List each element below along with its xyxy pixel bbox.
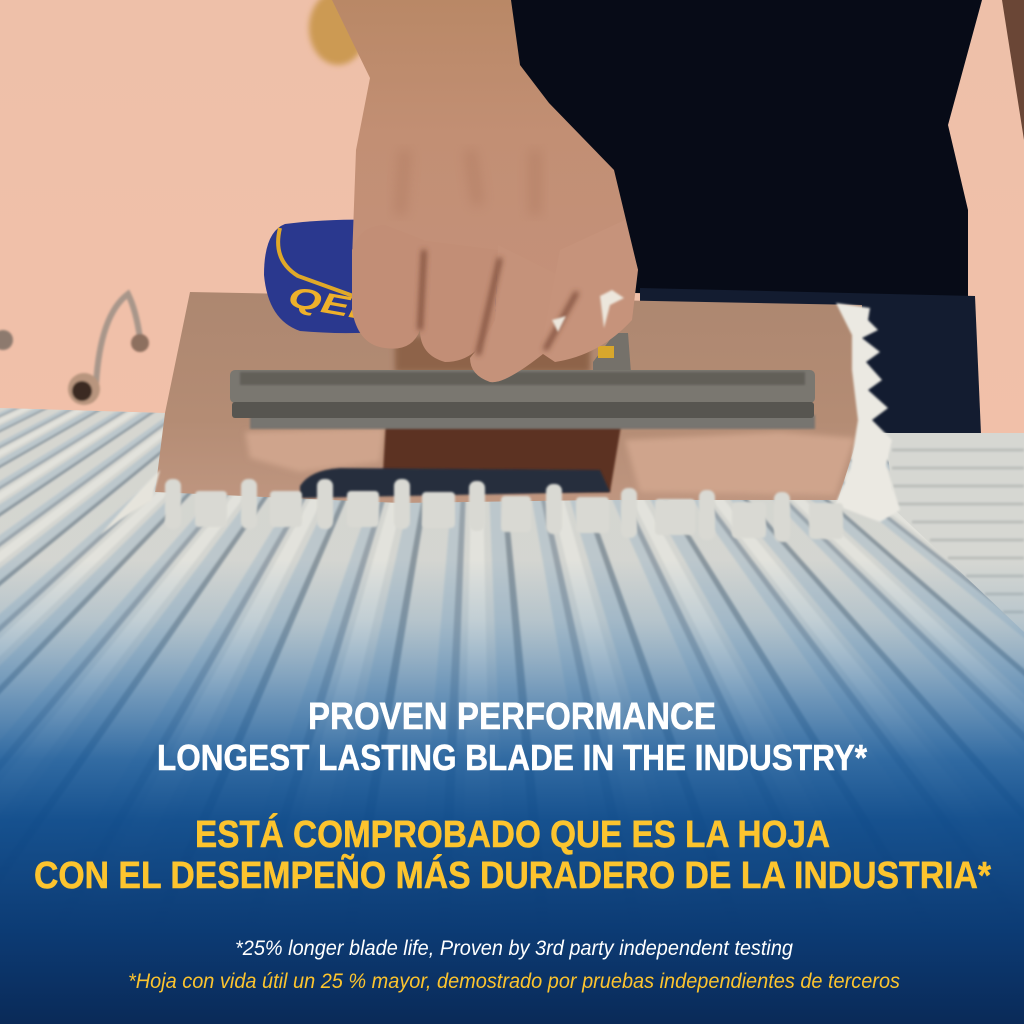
- spanish headline line one: ESTÁ COMPROBADO QUE ES LA HOJA: [195, 812, 830, 856]
- plaster blob at left edge: [100, 470, 160, 535]
- fourth finger: [540, 220, 638, 362]
- blue trowel grip: [264, 219, 500, 333]
- right background edge: [1002, 0, 1024, 140]
- blue gradient overlay: [0, 560, 1024, 1024]
- trowel blade: [100, 292, 900, 542]
- wall faucet pipes: [0, 294, 149, 405]
- back of hand: [332, 0, 638, 300]
- grip logo text: QEP: [286, 281, 381, 329]
- bottom blade teeth: [165, 479, 843, 542]
- ridged adhesive surface: [0, 408, 1024, 827]
- plaster on knuckle: [552, 316, 566, 332]
- english footnote: *25% longer blade life, Proven by 3rd party independent testing: [235, 937, 793, 960]
- right panel with horizontal ridges: [885, 433, 1024, 632]
- plaster on fingers: [600, 290, 624, 328]
- first finger: [352, 225, 424, 349]
- english headline line two: LONGEST LASTING BLADE IN THE INDUSTRY*: [157, 737, 867, 778]
- tendon shading: [400, 150, 535, 215]
- plaster smears on blade: [245, 428, 855, 495]
- dark shirt: [480, 0, 982, 302]
- english headline line one: PROVEN PERFORMANCE: [308, 696, 716, 738]
- jeans: [640, 288, 981, 434]
- grey reflection of bar: [250, 415, 815, 429]
- brown reflection in blade: [382, 420, 622, 492]
- wall background: [0, 0, 1024, 440]
- spanish footnote: *Hoja con vida útil un 25 % mayor, demostrado por pruebas independientes de terceros: [128, 970, 900, 993]
- round wall fixture: [309, 0, 367, 65]
- footnotes: [128, 937, 900, 993]
- ridge lines: [0, 408, 1024, 776]
- trowel handle bar: [230, 333, 815, 418]
- second finger: [418, 240, 498, 362]
- plaster on right blade teeth: [835, 303, 900, 522]
- headline block: [34, 696, 991, 897]
- dark tool reflection: [300, 468, 610, 498]
- third finger: [470, 245, 578, 382]
- arm and hand: [332, 0, 638, 382]
- upper reflection under hand: [395, 335, 590, 372]
- finger shadows: [420, 250, 577, 355]
